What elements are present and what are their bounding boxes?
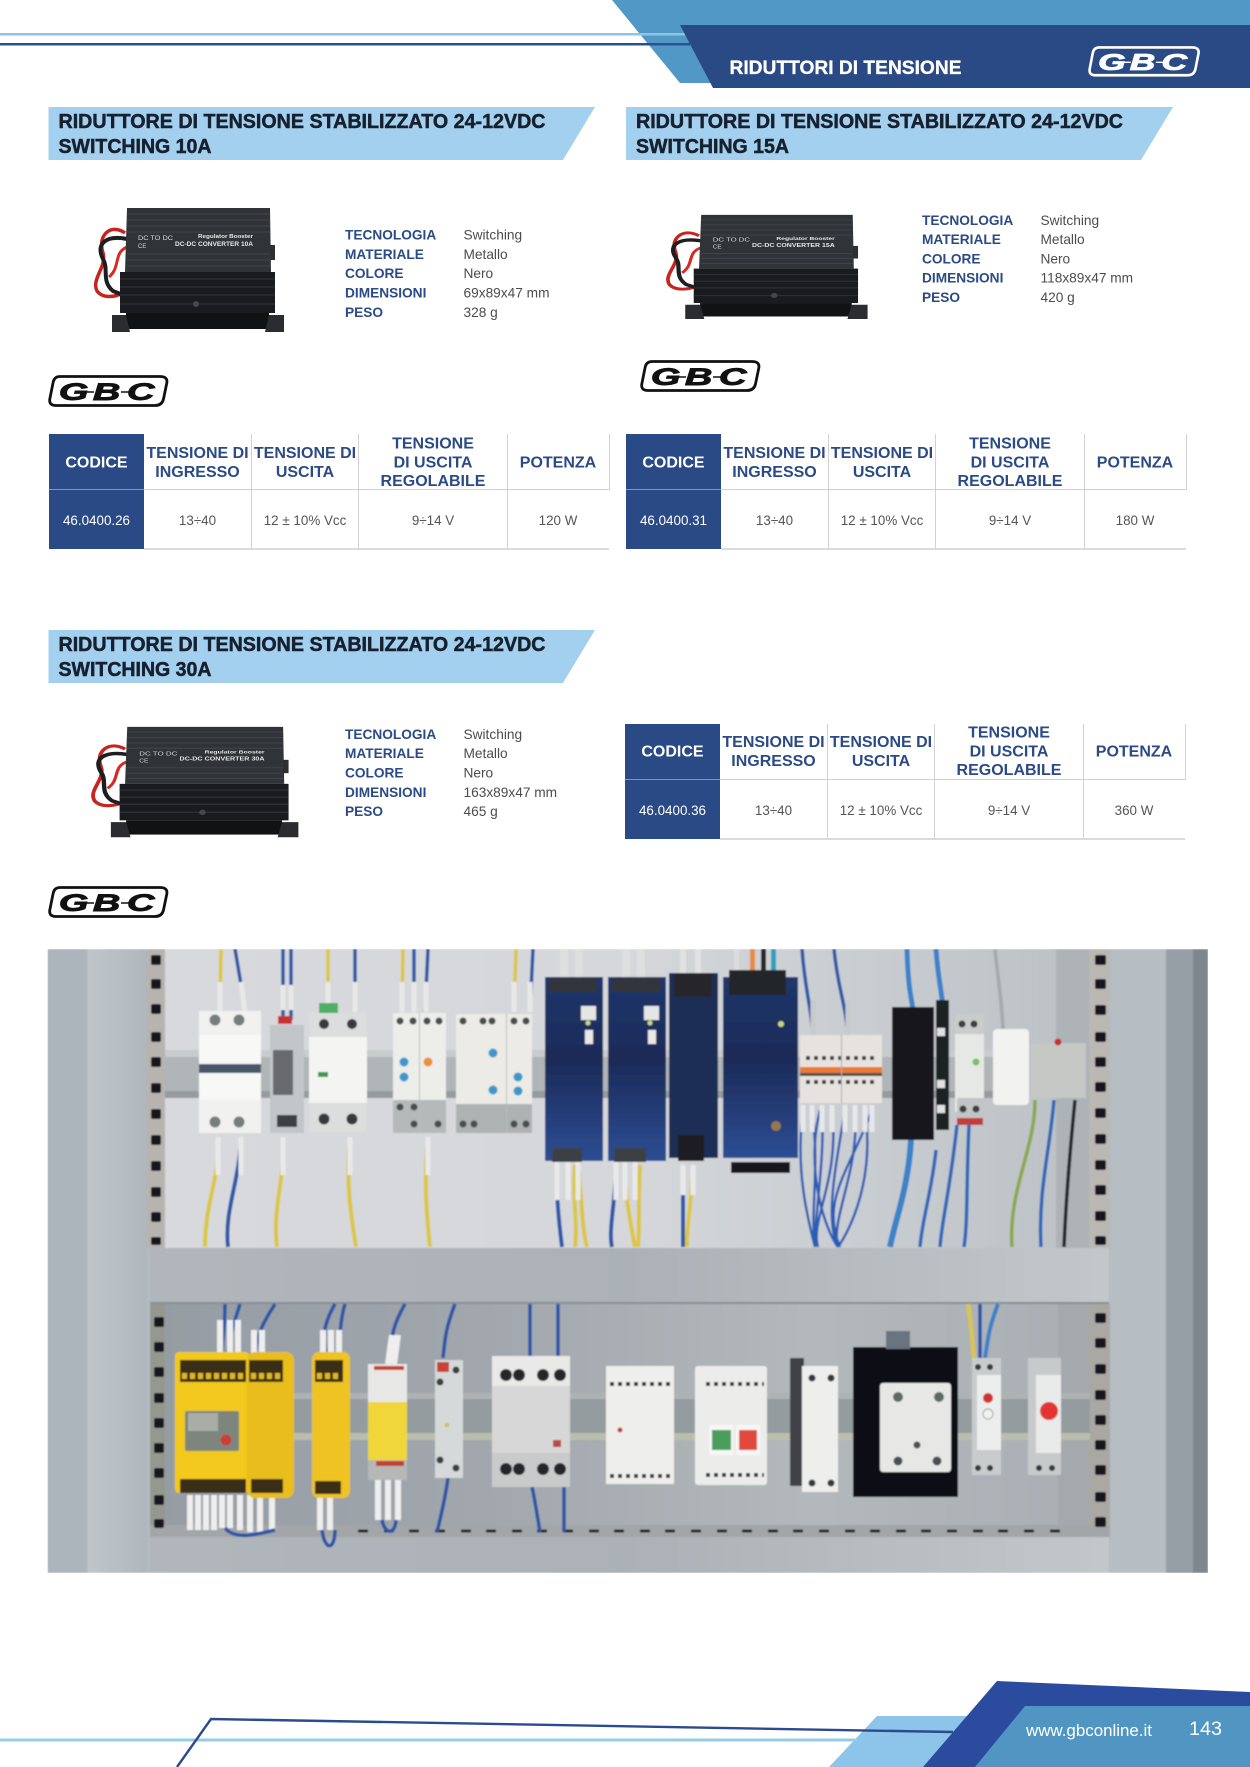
- table: 10A: REGOLABILE: [381, 473, 486, 490]
- header title: RIDUTTORI DI TENSIONE: [730, 58, 962, 79]
- table: 15A: DI USCITA: [971, 454, 1050, 472]
- product photo: converter 30A: Regulator Booster: [205, 750, 265, 755]
- table: 10A: DI USCITA: [394, 454, 473, 472]
- header logo: GBC: GBC: [1098, 50, 1189, 75]
- product photo: converter 10A: [96, 208, 284, 332]
- specs: 15A: 420 g: [1040, 290, 1075, 305]
- table: 30A: 9÷14 V: [988, 803, 1030, 818]
- specs: 10A: 69x89x47 mm: [464, 286, 549, 300]
- product photo: converter 15A: DC-DC CONVERTER 15A: [752, 243, 835, 249]
- table: 10A: TENSIONE: [392, 436, 474, 452]
- table: 10A: 46.0400.26: [63, 513, 130, 528]
- table: 10A: [49, 434, 610, 549]
- specs: 15A: 118x89x47 mm: [1040, 270, 1133, 286]
- table: 15A: 13÷40: [756, 513, 793, 528]
- table: 15A: USCITA: [853, 464, 912, 481]
- DIN rails: [165, 1050, 1090, 1440]
- logo: GBC 10A: GBC: [59, 378, 156, 405]
- lower row devices: [175, 1331, 1061, 1498]
- table: 30A: DI USCITA: [970, 744, 1049, 760]
- product photo: converter 15A: [668, 215, 868, 319]
- product photo: converter 15A: DC TO DC: [713, 238, 750, 243]
- product photo: converter 15A: CE: [713, 245, 722, 250]
- table: 10A: POTENZA: [520, 454, 597, 472]
- table: 30A: TENSIONE: [968, 724, 1050, 742]
- product heading: 30A: SWITCHING 30A: [58, 659, 212, 681]
- table: 15A: INGRESSO: [732, 464, 817, 481]
- specs: 30A: PESO: [345, 804, 383, 819]
- table: 15A: 180 W: [1116, 513, 1155, 528]
- product heading: 15A: RIDUTTORE DI TENSIONE STABILIZZATO 24-12VDC: [636, 111, 1123, 133]
- power supplies: [545, 949, 798, 1173]
- logo: GBC 15A: GBC: [651, 363, 748, 390]
- specs: 15A: PESO: [922, 290, 960, 305]
- product photo: converter 10A: DC-DC CONVERTER 10A: [175, 242, 254, 248]
- specs: 10A: Switching: [464, 228, 522, 242]
- table: 15A: REGOLABILE: [958, 473, 1063, 490]
- specs: 10A: MATERIALE: [345, 247, 424, 262]
- specs: 15A: Nero: [1040, 252, 1071, 266]
- cabinet frame and interior: [48, 949, 1208, 1573]
- table: 10A: USCITA: [276, 464, 335, 481]
- table: 30A: [625, 724, 1186, 839]
- product photo: converter 30A: DC TO DC: [139, 752, 178, 757]
- specs: 10A: Nero: [464, 266, 494, 281]
- product heading: 15A: SWITCHING 15A: [636, 136, 789, 158]
- table: 10A: 9÷14 V: [412, 513, 454, 528]
- specs: 30A: TECNOLOGIA: [345, 727, 436, 742]
- specs: 30A: COLORE: [345, 766, 404, 780]
- specs: 10A: Metallo: [464, 247, 508, 262]
- table: 10A: INGRESSO: [155, 464, 240, 481]
- specs: 10A: 328 g: [464, 305, 498, 320]
- product heading: 10A: SWITCHING 10A: [58, 136, 212, 158]
- page number: 143: [1189, 1719, 1222, 1740]
- specs: 15A: Switching: [1040, 213, 1099, 228]
- table: 30A: TENSIONE DI: [830, 734, 932, 751]
- product heading: 10A: RIDUTTORE DI TENSIONE STABILIZZATO 24-12VDC: [58, 111, 546, 133]
- table: 15A: TENSIONE: [969, 436, 1051, 452]
- table: 30A: INGRESSO: [731, 753, 816, 770]
- table: 15A: [626, 434, 1187, 549]
- table: 15A: TENSIONE DI: [831, 445, 933, 462]
- specs: 30A: Switching: [464, 727, 522, 742]
- photo: electrical cabinet: [48, 949, 1208, 1573]
- product photo: converter 10A: DC TO DC: [138, 236, 174, 242]
- specs: 30A: MATERIALE: [345, 746, 424, 761]
- specs: 15A: Metallo: [1040, 232, 1085, 247]
- logo: GBC 30A: GBC: [59, 889, 156, 916]
- specs: 10A: PESO: [345, 305, 383, 320]
- table: 10A: TENSIONE DI: [146, 445, 249, 462]
- specs: 15A: DIMENSIONI: [922, 270, 1003, 286]
- lower row wires and labels: [190, 1304, 998, 1546]
- specs: 30A: Metallo: [464, 746, 508, 761]
- product photo: converter 30A: DC-DC CONVERTER 30A: [180, 757, 265, 762]
- product heading: 30A: [48, 630, 595, 683]
- specs: 10A: DIMENSIONI: [345, 286, 426, 300]
- product photo: converter 10A: Regulator Booster: [198, 234, 253, 240]
- table: 15A: 9÷14 V: [989, 513, 1031, 528]
- specs: 15A: TECNOLOGIA: [922, 213, 1013, 228]
- specs: 30A: [345, 727, 557, 819]
- specs: 15A: COLORE: [922, 252, 981, 266]
- product photo: converter 30A: [93, 727, 298, 837]
- table: 30A: TENSIONE DI: [722, 734, 825, 751]
- table: 10A: TENSIONE DI: [254, 445, 356, 462]
- table: 30A: POTENZA: [1096, 744, 1173, 760]
- table: 30A: USCITA: [852, 753, 911, 770]
- specs: 30A: 465 g: [464, 804, 498, 819]
- table: 10A: CODICE: [65, 454, 128, 472]
- specs: 15A: MATERIALE: [922, 232, 1001, 247]
- product photo: converter 15A: Regulator Booster: [776, 237, 835, 242]
- table: 30A: 46.0400.36: [639, 803, 706, 818]
- table: 30A: REGOLABILE: [957, 762, 1062, 779]
- table: 30A: 360 W: [1115, 803, 1154, 818]
- specs: 10A: TECNOLOGIA: [345, 228, 436, 242]
- specs: 30A: DIMENSIONI: [345, 785, 426, 800]
- product photo: converter 30A: CE: [139, 759, 148, 764]
- mounting holes: [151, 955, 1106, 1531]
- specs: 30A: Nero: [464, 766, 494, 780]
- table: 10A: 12 ± 10% Vcc: [264, 513, 347, 528]
- table: 15A: TENSIONE DI: [723, 445, 826, 462]
- header band: [0, 0, 1250, 88]
- footer band: [0, 1681, 1250, 1767]
- product photo: converter 10A: CE: [138, 244, 146, 250]
- table: 10A: 120 W: [539, 513, 578, 528]
- specs: 30A: 163x89x47 mm: [464, 785, 557, 800]
- table: 10A: 13÷40: [179, 513, 216, 528]
- table: 30A: 12 ± 10% Vcc: [840, 803, 923, 818]
- specs: 10A: COLORE: [345, 266, 404, 281]
- wires: upper row: [205, 949, 1075, 1247]
- table: 15A: 12 ± 10% Vcc: [841, 513, 924, 528]
- table: 15A: 46.0400.31: [640, 513, 707, 528]
- specs: 10A: [345, 228, 549, 320]
- terminal blocks and small modules: [800, 1000, 1086, 1140]
- product heading: 15A: [626, 107, 1173, 160]
- specs: 15A: [922, 213, 1133, 305]
- upper row devices: [199, 1003, 532, 1133]
- table: 15A: CODICE: [642, 454, 705, 472]
- footer website: www.gbconline.it: [1025, 1721, 1152, 1740]
- product heading: 10A: [48, 107, 595, 160]
- table: 30A: CODICE: [641, 744, 704, 760]
- product heading: 30A: RIDUTTORE DI TENSIONE STABILIZZATO 24-12VDC: [58, 634, 546, 656]
- table: 15A: POTENZA: [1097, 454, 1174, 472]
- table: 30A: 13÷40: [755, 803, 792, 818]
